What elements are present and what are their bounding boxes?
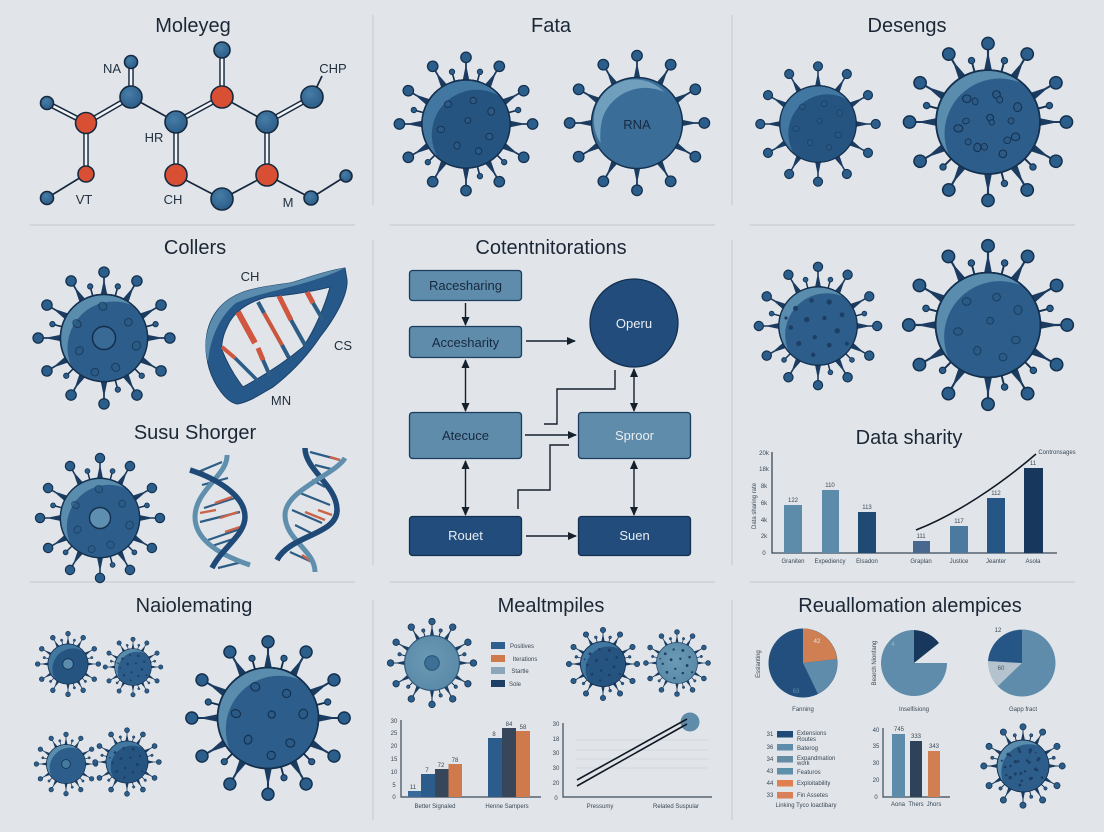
panel: Mealtmpiles — [387, 595, 712, 810]
legend table: Linking Tyco Ioactibary — [776, 803, 836, 809]
bar chart: Data sharity: 117 — [954, 519, 964, 525]
bar chart: Data sharity: 18k — [759, 467, 770, 473]
molecular structure diagram: M — [283, 195, 293, 210]
bar chart: Data sharity: 110 — [825, 483, 835, 489]
legend table: work — [796, 761, 811, 767]
bar chart: Data sharity: Expediency — [814, 559, 846, 565]
bar chart: 30 — [873, 761, 880, 767]
bar chart: Data sharity: 11 — [1030, 461, 1037, 467]
legend: Startle — [511, 669, 529, 675]
molecular structure diagram: CHP — [319, 61, 347, 76]
DNA double helix left — [190, 455, 250, 568]
pie chart 1: Fanning — [792, 707, 814, 713]
box: Suen: Suen — [619, 528, 650, 543]
bar chart: 0 — [874, 795, 878, 801]
bar chart: Data sharity: 8k — [761, 484, 768, 490]
bar chart: Aona — [891, 802, 906, 808]
legend table: Expandmation — [797, 756, 835, 762]
small virus 3 — [34, 732, 98, 796]
line chart — [553, 712, 712, 810]
pie chart 2: 4 — [891, 642, 895, 648]
dark virus — [566, 627, 640, 701]
pie chart 3: 60 — [998, 666, 1005, 672]
panel: Collers — [33, 237, 352, 583]
pie chart 1 — [756, 628, 838, 713]
box: Accesharity: Accesharity — [432, 335, 500, 350]
legend — [491, 642, 537, 688]
grouped bar chart: 84 — [506, 722, 513, 728]
grouped bar chart: 78 — [452, 758, 459, 764]
molecular structure diagram — [40, 42, 352, 210]
grouped bar chart: 10 — [391, 770, 398, 776]
pie chart 1: 42 — [814, 639, 821, 645]
line chart: Pressumy — [587, 804, 613, 810]
bar chart: Data sharity: 111 — [916, 534, 926, 540]
heading: Collers: Collers — [164, 237, 226, 259]
box: Racesharing: Racesharing — [429, 278, 502, 293]
bar chart: Data sharity — [752, 450, 1076, 565]
molecular structure diagram: CH — [164, 192, 182, 207]
DNA ribbon: MN — [271, 393, 291, 408]
legend: Iterations — [513, 657, 537, 663]
pie chart 2: Bearch Nionfang — [872, 641, 878, 685]
bar chart: Data sharity: Data sharing rate — [752, 482, 758, 529]
virus particle large — [903, 240, 1073, 410]
virus particle labelled RNA: RNA — [623, 117, 651, 132]
bar chart: Data sharity: Asola — [1025, 559, 1041, 565]
bar chart: Thers — [908, 802, 924, 808]
bar chart: Data sharity: 112 — [991, 491, 1001, 497]
heading: Mealtmpiles: Mealtmpiles — [498, 595, 604, 617]
panel: Fata — [394, 15, 710, 196]
pie chart 2 — [872, 630, 947, 713]
pie chart 1: 63 — [793, 689, 800, 695]
bar chart: Data sharity: 2k — [761, 534, 768, 540]
panel: Desengs — [756, 15, 1073, 207]
line chart: Related Suspular — [653, 804, 699, 810]
line chart: 30 — [553, 722, 560, 728]
line chart: 18 — [553, 737, 560, 743]
legend table — [767, 731, 836, 809]
grouped bar chart: Better Signaled — [414, 804, 456, 810]
virus with pale nucleus — [35, 453, 165, 583]
panel: Reuallomation alempices — [756, 595, 1065, 809]
pie chart 1: Esslanting — [756, 650, 762, 678]
box: Atecuce: Atecuce — [442, 428, 489, 443]
bar chart: Data sharity: 20k — [759, 451, 770, 457]
legend table: 31 — [767, 732, 774, 738]
legend table: 44 — [767, 781, 774, 787]
legend table: Exploitability — [797, 781, 830, 787]
heading: Moleyeg: Moleyeg — [155, 15, 231, 37]
virus particle textured — [981, 724, 1065, 808]
molecular structure diagram: VT — [76, 192, 92, 207]
panel: right middle viruses and chart — [752, 240, 1076, 565]
legend table: 36 — [767, 745, 774, 751]
bar chart: Data sharity: 6k — [761, 501, 768, 507]
grouped bar chart: 7 — [425, 768, 429, 774]
grouped bar chart: 0 — [392, 795, 396, 801]
bar chart: 745 — [894, 727, 905, 733]
bar chart: Jhors — [927, 802, 941, 808]
virus particle — [394, 52, 538, 196]
DNA ribbon: CS — [334, 338, 352, 353]
legend table: Baterog — [797, 746, 818, 752]
bar chart: Data sharity: 113 — [862, 505, 872, 511]
light virus with nucleus — [387, 618, 477, 708]
virus particle dotted — [754, 262, 882, 390]
heading: Reuallomation alempices: Reuallomation alempices — [798, 595, 1022, 617]
legend table: Extensions — [797, 731, 826, 737]
pie chart 2: Inselfisiong — [899, 707, 929, 713]
pie chart 3 — [988, 628, 1056, 713]
bar chart: Data sharity: 122 — [788, 498, 799, 504]
small virus 4 — [93, 728, 161, 796]
bar chart: Data sharity: Contronsages — [1038, 450, 1076, 456]
bar chart: Data sharity: 0 — [762, 551, 766, 557]
grouped bar chart: Henne Sampers — [485, 804, 529, 810]
grouped bar chart: 8 — [492, 732, 496, 738]
DNA double helix right — [277, 448, 345, 572]
heading: Susu Shorger: Susu Shorger — [134, 422, 256, 444]
node: Operu — [590, 279, 678, 367]
grouped bar chart: 15 — [391, 757, 398, 763]
box: Rouet — [410, 516, 522, 556]
box: Rouet: Rouet — [448, 528, 483, 543]
legend: Sole — [509, 682, 522, 688]
panel: flow diagram — [410, 237, 690, 556]
bar chart: Data sharity: Jeanter — [986, 559, 1006, 565]
small virus 1 — [35, 631, 101, 697]
box: Atecuce — [410, 412, 522, 458]
legend table: 43 — [767, 769, 774, 775]
DNA ribbon — [206, 268, 352, 408]
grouped bar chart: 72 — [438, 763, 445, 769]
legend table: 34 — [767, 757, 774, 763]
virus particle labelled RNA — [564, 50, 710, 196]
bar chart: 333 — [911, 734, 922, 740]
small virus 2 — [103, 637, 163, 697]
legend: Positives — [510, 644, 534, 650]
grouped bar chart: 5 — [392, 783, 396, 789]
bar chart: Data sharity: Justice — [950, 559, 969, 565]
legend table: Fin Assetes — [797, 793, 828, 799]
bar chart — [873, 727, 950, 808]
bar chart: 35 — [873, 744, 880, 750]
virus particle large — [903, 37, 1073, 207]
bar chart: 40 — [873, 728, 880, 734]
box: Sproor: Sproor — [615, 428, 655, 443]
DNA ribbon: CH — [241, 269, 259, 284]
box: Sproor — [578, 412, 690, 458]
box: Accesharity — [410, 326, 522, 358]
grouped bar chart: 25 — [391, 731, 398, 737]
light dotted virus — [643, 629, 711, 697]
box: Racesharing — [410, 270, 522, 300]
heading: Cotentnitorations: Cotentnitorations — [475, 237, 627, 259]
heading: Data sharity: Data sharity — [856, 427, 962, 449]
grouped bar chart: 30 — [391, 719, 398, 725]
arrows between boxes — [466, 303, 634, 536]
bar chart: Data sharity: Graniten — [781, 559, 805, 565]
grouped bar chart: 11 — [410, 785, 417, 791]
pie chart 3: 12 — [995, 628, 1002, 634]
heading: Desengs: Desengs — [868, 15, 946, 37]
line chart: 0 — [554, 796, 558, 802]
bar chart: Data sharity: Graplan — [910, 559, 932, 565]
heading: Fata: Fata — [531, 15, 572, 37]
grouped bar chart: 58 — [520, 725, 527, 731]
molecular structure diagram: NA — [103, 61, 121, 76]
grouped bar chart — [391, 719, 541, 810]
virus particle small — [756, 62, 880, 186]
bar chart: Data sharity: 4k — [761, 518, 768, 524]
panel: molecule — [40, 15, 352, 210]
box: Suen — [578, 516, 690, 556]
panel: Naiolemating — [34, 595, 350, 800]
bar chart: Data sharity: Elsadon — [856, 559, 878, 565]
molecular structure diagram: HR — [145, 130, 163, 145]
node: Operu: Operu — [616, 316, 652, 331]
bar chart: 20 — [873, 778, 880, 784]
pie chart 3: Gapp fract — [1009, 707, 1037, 713]
virus with nucleus — [33, 267, 175, 409]
legend table: 33 — [767, 793, 774, 799]
line chart: 30 — [553, 751, 560, 757]
large virus — [186, 636, 350, 800]
line chart: 30 — [553, 766, 560, 772]
line chart: 20 — [553, 781, 560, 787]
heading: Naiolemating: Naiolemating — [136, 595, 252, 617]
grouped bar chart: 20 — [391, 744, 398, 750]
legend table: Featuros — [797, 770, 821, 776]
bar chart: 343 — [929, 744, 940, 750]
legend table: Routes — [797, 737, 816, 743]
